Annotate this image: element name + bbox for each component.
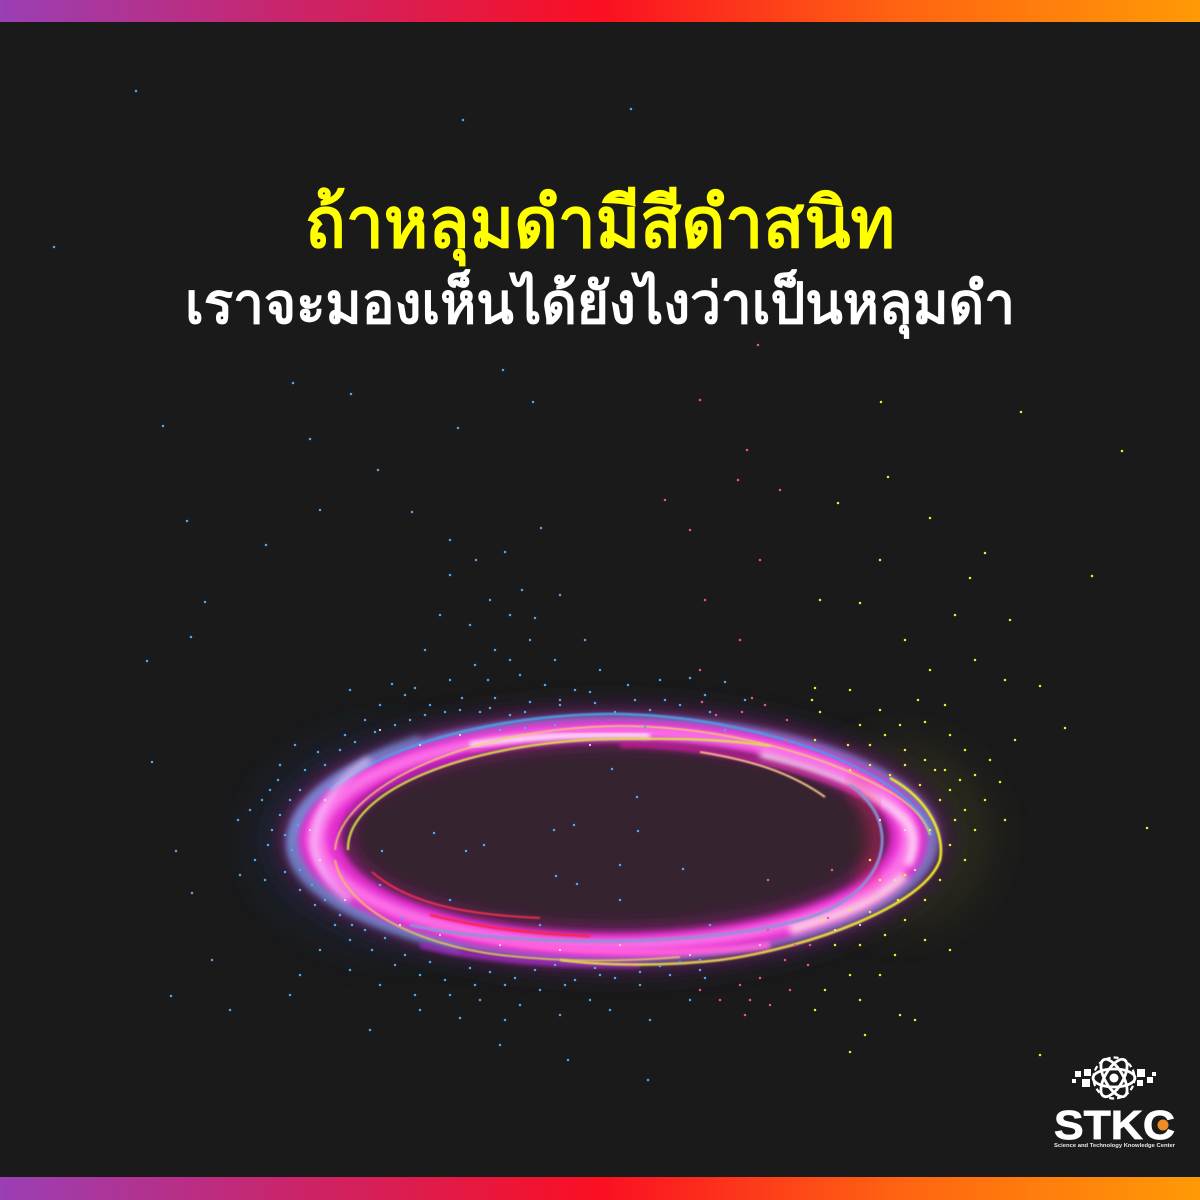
top gradient bar	[0, 0, 1200, 22]
logo dot	[1158, 1120, 1168, 1130]
glowing ring	[250, 697, 990, 981]
bottom gradient bar	[0, 1177, 1200, 1200]
title	[185, 184, 1015, 339]
star particles: pink	[665, 345, 832, 1015]
star particles: ring overlay highlights	[310, 730, 915, 955]
logo tagline: Science and Technology Knowledge Center	[1054, 1143, 1175, 1149]
logo wordmark: STKC	[1054, 1102, 1175, 1148]
star particles: blue	[54, 91, 745, 1080]
star particles: yellow	[812, 402, 1147, 1055]
title line 2: white: เราจะมองเห็นได้ยังไงว่าเป็นหลุมดำ	[185, 269, 1015, 339]
STKC logo	[1054, 1055, 1175, 1149]
icon: pixel squares	[1072, 1069, 1156, 1087]
icon: atom with pixels	[1093, 1055, 1135, 1101]
title line 1: yellow: ถ้าหลุมดำมีสีดำสนิท	[305, 184, 895, 266]
